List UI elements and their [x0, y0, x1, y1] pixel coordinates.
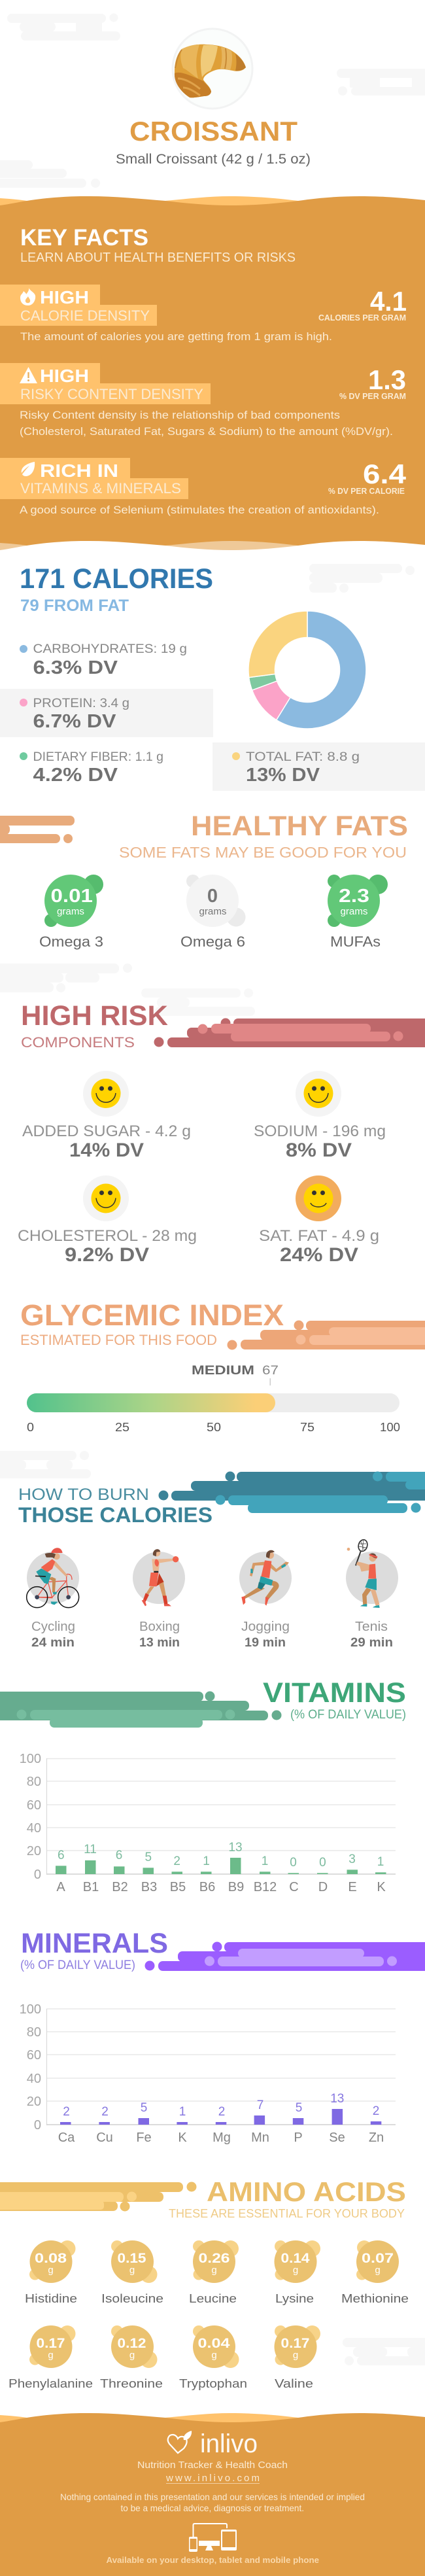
heading: glycemic index: GLYCEMIC INDEX — [20, 1298, 284, 1332]
risk item: saturated fat — [259, 1175, 379, 1266]
bar chart: vitamins: 6 — [116, 1849, 122, 1862]
amino acid: lysine: Lysine — [275, 2291, 314, 2305]
exercise: jogging: Jogging — [241, 1620, 290, 1634]
amino acid: lysine: g — [293, 2265, 298, 2276]
risk item: cholesterol: CHOLESTEROL - 28 mg — [18, 1227, 197, 1245]
serving size subtitle: Small Croissant (42 g / 1.5 oz) — [116, 152, 311, 167]
amino acid: isoleucine: Isoleucine — [101, 2291, 163, 2305]
key fact: rich in vitamins and minerals: 6.4 — [363, 459, 407, 489]
decorative banner: minerals — [145, 1941, 425, 1971]
bar chart: vitamins: 0 — [34, 1868, 41, 1882]
nutrient: total fat — [212, 742, 425, 791]
amino acid: phenylalanine — [8, 2325, 93, 2390]
nutrient: carbohydrates — [20, 642, 187, 678]
bar chart: minerals: Mn — [251, 2131, 269, 2145]
exercise: cycling: Cycling — [31, 1620, 75, 1634]
exercise: boxing: Boxing — [139, 1620, 180, 1634]
bar chart: vitamins: 6 — [58, 1849, 65, 1862]
key fact: rich in vitamins and minerals: A good source of Selenium (stimulates the creation of antioxidants). — [20, 504, 379, 516]
key fact: calorie density: HIGH — [40, 287, 89, 307]
bar chart: vitamins: 13 — [228, 1841, 243, 1854]
amino acid: histidine: 0.08 — [35, 2251, 67, 2266]
bar chart: minerals: 1 — [179, 2105, 186, 2119]
key fact: risky content density: RISKY CONTENT DENSITY — [20, 386, 203, 402]
bar chart: minerals: 2 — [373, 2104, 379, 2118]
amino acid: phenylalanine: g — [48, 2350, 54, 2361]
amino acid: histidine: g — [48, 2265, 54, 2276]
bar chart: vitamins: 2 — [173, 1854, 180, 1868]
amino acid: leucine: Leucine — [189, 2291, 237, 2305]
subheading: amino acids: THESE ARE ESSENTIAL FOR YOUR BODY — [169, 2207, 405, 2220]
bar chart: minerals: P — [294, 2131, 303, 2145]
subheading: healthy fats: SOME FATS MAY BE GOOD FOR YOU — [119, 844, 407, 861]
stat: omega 6 — [180, 875, 246, 950]
key fact: calorie density: CALORIES PER GRAM — [318, 313, 406, 322]
bar chart: minerals: 20 — [27, 2095, 41, 2109]
nutrient: protein — [0, 689, 213, 737]
nutrient: total fat: 13% DV — [246, 765, 320, 786]
stat: MUFAs: MUFAs — [330, 933, 381, 950]
heading: vitamins: VITAMINS — [263, 1677, 406, 1709]
heading: calories: 171 CALORIES — [20, 563, 213, 595]
background cloud: calories — [309, 564, 415, 593]
key fact: risky content density: Risky Content density is the relationship of bad components — [20, 409, 340, 421]
website link: www.inlivo.com — [165, 2473, 260, 2484]
amino acid: histidine — [25, 2240, 77, 2305]
bar chart: vitamins: B1 — [83, 1880, 99, 1894]
nutrient: dietary fiber: 4.2% DV — [33, 765, 118, 786]
bar chart: minerals: 5 — [141, 2101, 147, 2115]
key fact: calorie density: The amount of calories you are getting from 1 gram is high. — [20, 330, 332, 343]
risk item: cholesterol: 9.2% DV — [65, 1244, 149, 1266]
bar chart: vitamins: B9 — [228, 1880, 244, 1894]
stat: MUFAs: 2.3 — [339, 886, 369, 907]
tagline: Nutrition Tracker & Health Coach — [137, 2460, 288, 2471]
risk item: added sugar: 14% DV — [69, 1140, 144, 1161]
amino acid: valine: 0.17 — [281, 2336, 310, 2351]
bar chart: vitamins: 11 — [84, 1843, 97, 1856]
amino acid: phenylalanine: Phenylalanine — [8, 2376, 93, 2390]
stat: MUFAs — [328, 875, 388, 950]
disclaimer: Nothing contained in this presentation and our services is intended or implied — [60, 2492, 365, 2502]
bar chart: vitamins: 1 — [262, 1854, 268, 1868]
stat: omega 3: grams — [57, 906, 84, 917]
heading: minerals: MINERALS — [21, 1928, 168, 1959]
glycemic gauge: 67 — [262, 1363, 279, 1378]
background cloud: amino acids — [343, 2338, 425, 2365]
nutrient: carbohydrates: 6.3% DV — [33, 657, 118, 678]
bar chart: minerals: 2 — [218, 2105, 225, 2119]
amino acid: threonine: 0.12 — [118, 2336, 146, 2351]
subheading: key facts: LEARN ABOUT HEALTH BENEFITS OR RISKS — [20, 251, 296, 265]
amino acid: methionine: g — [375, 2265, 381, 2276]
key fact: rich in vitamins and minerals: RICH IN — [40, 461, 118, 481]
key fact: calorie density: 4.1 — [370, 286, 407, 317]
exercise: tennis: 29 min — [350, 1636, 393, 1650]
exercise: boxing: 13 min — [139, 1636, 180, 1650]
key fact: rich in vitamins and minerals: % DV PER CALORIE — [328, 486, 405, 496]
bar chart: vitamins: 5 — [145, 1851, 152, 1864]
heading: those calories: THOSE CALORIES — [18, 1503, 212, 1527]
glycemic gauge: 50 — [207, 1421, 221, 1434]
bar chart: vitamins: A — [56, 1880, 65, 1894]
risk item: added sugar — [22, 1071, 191, 1161]
amino acid: leucine — [189, 2240, 239, 2305]
decorative banner: vitamins — [0, 1692, 281, 1728]
bar chart: minerals: 13 — [330, 2092, 344, 2106]
bar chart: minerals: 80 — [27, 2025, 41, 2040]
exercise: boxing — [133, 1549, 185, 1650]
key fact: risky content density: % DV PER GRAM — [339, 391, 406, 401]
decorative banner: burn calories — [158, 1472, 425, 1513]
decorative banner: healthy fats — [0, 816, 75, 843]
stat: omega 3: 0.01 — [51, 886, 93, 907]
availability note: Available on your desktop, tablet and mobile phone — [106, 2555, 319, 2565]
subheading: glycemic index: ESTIMATED FOR THIS FOOD — [20, 1332, 217, 1348]
bar chart: minerals: 0 — [34, 2118, 41, 2132]
bar chart: vitamins: B2 — [112, 1880, 128, 1894]
bar chart: minerals — [20, 2002, 396, 2145]
bar chart: minerals: Fe — [136, 2131, 152, 2145]
amino acid: methionine: Methionine — [341, 2291, 409, 2305]
bar chart: vitamins: 100 — [20, 1752, 41, 1766]
amino acid: methionine: 0.07 — [362, 2251, 394, 2266]
stat: omega 3: Omega 3 — [39, 933, 103, 950]
bar chart: minerals: Cu — [96, 2131, 113, 2145]
key fact: calorie density: CALORIE DENSITY — [20, 307, 150, 324]
exercise: cycling — [27, 1548, 79, 1650]
nutrient: dietary fiber: DIETARY FIBER: 1.1 g — [33, 750, 163, 764]
bar chart: minerals: 2 — [101, 2105, 109, 2119]
risk item: saturated fat: 24% DV — [280, 1244, 358, 1266]
amino acid: tryptophan: Tryptophan — [179, 2376, 247, 2390]
risk item: sodium: 8% DV — [286, 1140, 352, 1161]
bar chart: vitamins: D — [318, 1880, 328, 1894]
stat: MUFAs: grams — [340, 906, 367, 917]
bar chart: vitamins: B5 — [170, 1880, 186, 1894]
nutrient: protein: PROTEIN: 3.4 g — [33, 697, 129, 710]
bar chart: vitamins: 0 — [319, 1856, 326, 1870]
nutrient: protein: 6.7% DV — [33, 711, 116, 732]
subheading: minerals: (% OF DAILY VALUE) — [20, 1958, 135, 1972]
stat: omega 6: Omega 6 — [180, 933, 245, 950]
risk item: cholesterol — [18, 1175, 197, 1266]
risk item: sodium: SODIUM - 196 mg — [254, 1123, 386, 1140]
bar chart: vitamins: B6 — [199, 1880, 215, 1894]
amino acid: threonine: g — [129, 2350, 135, 2361]
amino acid: valine: g — [293, 2350, 298, 2361]
decorative banner: glycemic index — [228, 1320, 425, 1350]
bar chart: minerals: Zn — [369, 2131, 384, 2145]
bar chart: vitamins: B3 — [141, 1880, 157, 1894]
stat: omega 3 — [39, 875, 103, 950]
amino acid: isoleucine: g — [129, 2265, 135, 2276]
disclaimer — [60, 2492, 365, 2513]
amino acid: methionine — [341, 2240, 409, 2305]
key fact: rich in vitamins and minerals — [0, 458, 407, 516]
bar chart: vitamins: 20 — [27, 1844, 41, 1858]
bar chart: vitamins: B12 — [254, 1880, 277, 1894]
amino acid: lysine: 0.14 — [281, 2251, 310, 2266]
bar chart: minerals: 7 — [257, 2098, 264, 2112]
donut chart: calorie sources — [248, 611, 366, 729]
amino acid: leucine: 0.26 — [199, 2251, 230, 2266]
glycemic gauge — [27, 1363, 400, 1434]
bar chart: vitamins — [20, 1752, 396, 1894]
heading: how to burn: HOW TO BURN — [18, 1486, 149, 1504]
disclaimer: to be a medical advice, diagnosis or treatment. — [120, 2503, 304, 2513]
heading: healthy fats: HEALTHY FATS — [191, 810, 408, 842]
bar chart: vitamins: 40 — [27, 1821, 41, 1836]
glycemic gauge: 25 — [115, 1421, 129, 1434]
nutrient: carbohydrates: CARBOHYDRATES: 19 g — [33, 642, 187, 656]
logo: inlivo: inlivo — [200, 2429, 258, 2458]
title: CROISSANT — [129, 116, 298, 147]
glycemic gauge: MEDIUM — [192, 1363, 254, 1378]
icon: boxer — [142, 1549, 178, 1606]
stat: omega 6: 0 — [207, 886, 218, 907]
glycemic gauge: 100 — [380, 1421, 400, 1434]
bar chart: minerals: 40 — [27, 2072, 41, 2086]
amino acid: threonine — [100, 2325, 163, 2390]
key fact: rich in vitamins and minerals: VITAMINS & MINERALS — [20, 480, 181, 496]
nutrient: total fat: TOTAL FAT: 8.8 g — [246, 750, 360, 764]
bar chart: vitamins: K — [377, 1880, 386, 1894]
stat: omega 6: grams — [199, 906, 226, 917]
bar chart: vitamins: 0 — [290, 1856, 297, 1870]
background cloud: header left lower — [0, 160, 100, 188]
decorative banner: high risk — [154, 1018, 425, 1047]
bar chart: minerals: 100 — [20, 2002, 41, 2017]
bar chart: minerals: Se — [329, 2131, 345, 2145]
risk item: added sugar: ADDED SUGAR - 4.2 g — [22, 1123, 191, 1140]
subheading: calories from fat: 79 FROM FAT — [20, 597, 129, 615]
icon: tennis player — [347, 1539, 380, 1608]
amino acid: threonine: Threonine — [100, 2376, 163, 2390]
icon: leaf — [22, 462, 35, 476]
nutrient: dietary fiber — [20, 750, 163, 786]
panel: key facts background — [0, 196, 425, 556]
heading: high risk: HIGH RISK — [21, 1000, 168, 1032]
risk item: saturated fat: SAT. FAT - 4.9 g — [259, 1227, 379, 1245]
amino acid: valine — [275, 2325, 320, 2390]
bar chart: minerals: 5 — [296, 2101, 302, 2115]
heading: amino acids: AMINO ACIDS — [207, 2176, 406, 2207]
logo: inlivo — [168, 2429, 258, 2458]
exercise: jogging — [239, 1550, 292, 1650]
background cloud: burn calories — [0, 1451, 91, 1478]
subheading: vitamins: (% OF DAILY VALUE) — [290, 1708, 406, 1722]
bar chart: minerals: 60 — [27, 2048, 41, 2063]
icon: croissant photo in circle — [173, 29, 252, 109]
bar chart: vitamins: 60 — [27, 1798, 41, 1813]
bar chart: vitamins: E — [348, 1880, 357, 1894]
bar chart: minerals: Mg — [212, 2131, 231, 2145]
bar chart: vitamins: 1 — [377, 1855, 384, 1869]
bar chart: vitamins: 1 — [203, 1854, 210, 1868]
icon: flame — [20, 288, 35, 305]
background cloud: high risk left — [0, 964, 132, 992]
bar chart: vitamins: 3 — [348, 1853, 356, 1866]
heading: key facts: KEY FACTS — [20, 225, 148, 251]
subheading: components: COMPONENTS — [21, 1034, 135, 1051]
icon: devices — [189, 2524, 237, 2552]
bar chart: minerals: K — [178, 2131, 187, 2145]
bar chart: minerals: Ca — [58, 2131, 75, 2145]
amino acid: tryptophan: 0.04 — [197, 2336, 230, 2351]
key fact: risky content density: 1.3 — [368, 364, 406, 395]
exercise: jogging: 19 min — [245, 1636, 286, 1650]
glycemic gauge: 75 — [300, 1421, 314, 1434]
amino acid: histidine: Histidine — [25, 2291, 77, 2305]
bar chart: minerals: 2 — [63, 2105, 70, 2119]
amino acid: leucine: g — [211, 2265, 217, 2276]
glycemic gauge: 0 — [27, 1421, 34, 1434]
icon: cyclist — [27, 1548, 79, 1608]
amino acid: isoleucine: 0.15 — [118, 2251, 146, 2266]
key fact: risky content density: (Cholesterol, Saturated Fat, Sugars & Sodium) to the amount (%DV/gr). — [20, 425, 393, 438]
key fact: risky content density — [0, 363, 406, 438]
exercise: cycling: 24 min — [31, 1636, 75, 1650]
key fact: risky content density: HIGH — [40, 366, 89, 386]
background cloud: header top left — [7, 13, 120, 41]
amino acid: tryptophan — [179, 2325, 247, 2390]
key fact: calorie density — [0, 285, 407, 343]
background cloud: header right — [337, 69, 425, 96]
amino acid: phenylalanine: 0.17 — [37, 2336, 65, 2351]
decorative banner: amino acids — [0, 2182, 196, 2211]
exercise: tennis — [346, 1539, 398, 1650]
amino acid: lysine — [275, 2240, 320, 2305]
bar chart: vitamins: 80 — [27, 1775, 41, 1789]
amino acid: valine: Valine — [275, 2376, 313, 2390]
panel: footer — [0, 2413, 425, 2576]
background cloud: high risk centre — [141, 988, 255, 1016]
amino acid: isoleucine — [101, 2240, 163, 2305]
amino acid: tryptophan: g — [211, 2350, 217, 2361]
exercise: tennis: Tenis — [355, 1620, 388, 1634]
icon: warning triangle — [20, 367, 37, 383]
risk item: sodium — [254, 1071, 386, 1161]
bar chart: vitamins: C — [289, 1880, 299, 1894]
icon: jogger — [241, 1550, 289, 1606]
